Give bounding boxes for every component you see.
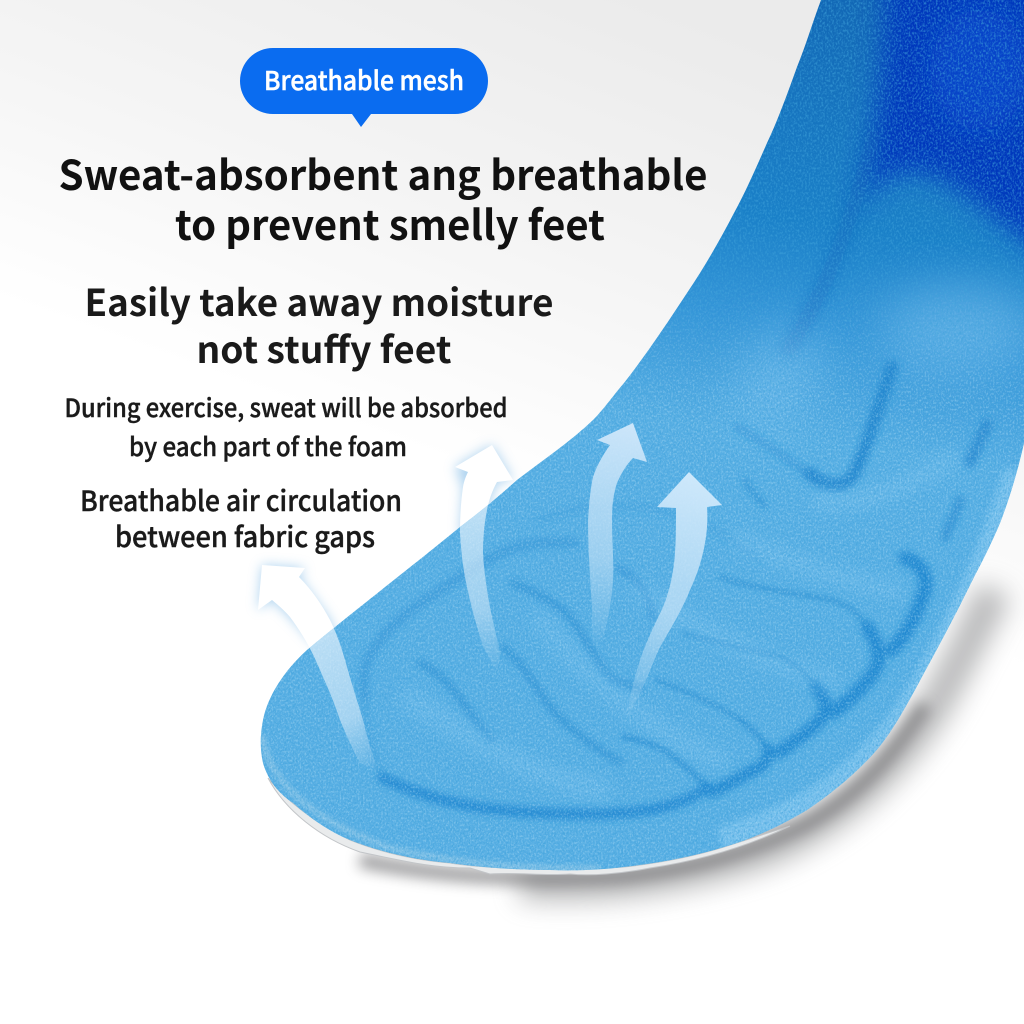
forefoot lighter rim	[720, 470, 1015, 838]
contact shadow	[360, 705, 925, 878]
text block: sweat absorption: During exercise, sweat will be absorbed	[64, 389, 508, 425]
toe pad grooves	[624, 577, 868, 787]
arrow 3	[588, 423, 647, 647]
text block: air circulation: Breathable air circulation	[80, 480, 402, 520]
deep blue heel cup	[860, 0, 1024, 265]
pill label	[240, 48, 488, 127]
arrow 4	[627, 472, 722, 720]
arch light patches	[715, 285, 1024, 447]
arch grooves	[737, 367, 987, 537]
subheading: not stuffy feet	[196, 320, 452, 374]
text block: air circulation: between fabric gaps	[115, 516, 375, 556]
main heading	[58, 142, 708, 252]
text block: sweat absorption: by each part of the foam	[129, 428, 407, 464]
main heading: to prevent smelly feet	[175, 192, 605, 252]
soft wide shadow	[520, 590, 995, 884]
arrow 1	[310, 628, 377, 768]
pad highlights	[410, 460, 950, 790]
text block: sweat absorption	[64, 389, 508, 464]
toe pad thick ends	[383, 558, 926, 814]
forefoot grooves	[364, 506, 760, 778]
arrow glows behind	[258, 445, 513, 667]
arrow heads above the insole	[258, 445, 513, 677]
text block: air circulation	[80, 480, 402, 556]
pill text: Breathable mesh	[264, 61, 464, 98]
left rim soft edge	[262, 735, 600, 868]
foam base edge	[268, 778, 790, 875]
arrow 2	[460, 504, 500, 668]
subheading	[84, 273, 554, 374]
fabric grain	[250, 0, 1024, 880]
pill shape	[240, 48, 488, 127]
insole shadow	[360, 590, 995, 884]
insole surface	[240, 0, 1024, 880]
heel highlight	[936, 17, 1024, 123]
insole illustration	[240, 0, 1024, 880]
subheading: Easily take away moisture	[84, 273, 554, 327]
main heading: Sweat-absorbent ang breathable	[58, 142, 708, 202]
fold shadow	[783, 198, 858, 352]
fabric grain light	[261, 280, 1024, 870]
